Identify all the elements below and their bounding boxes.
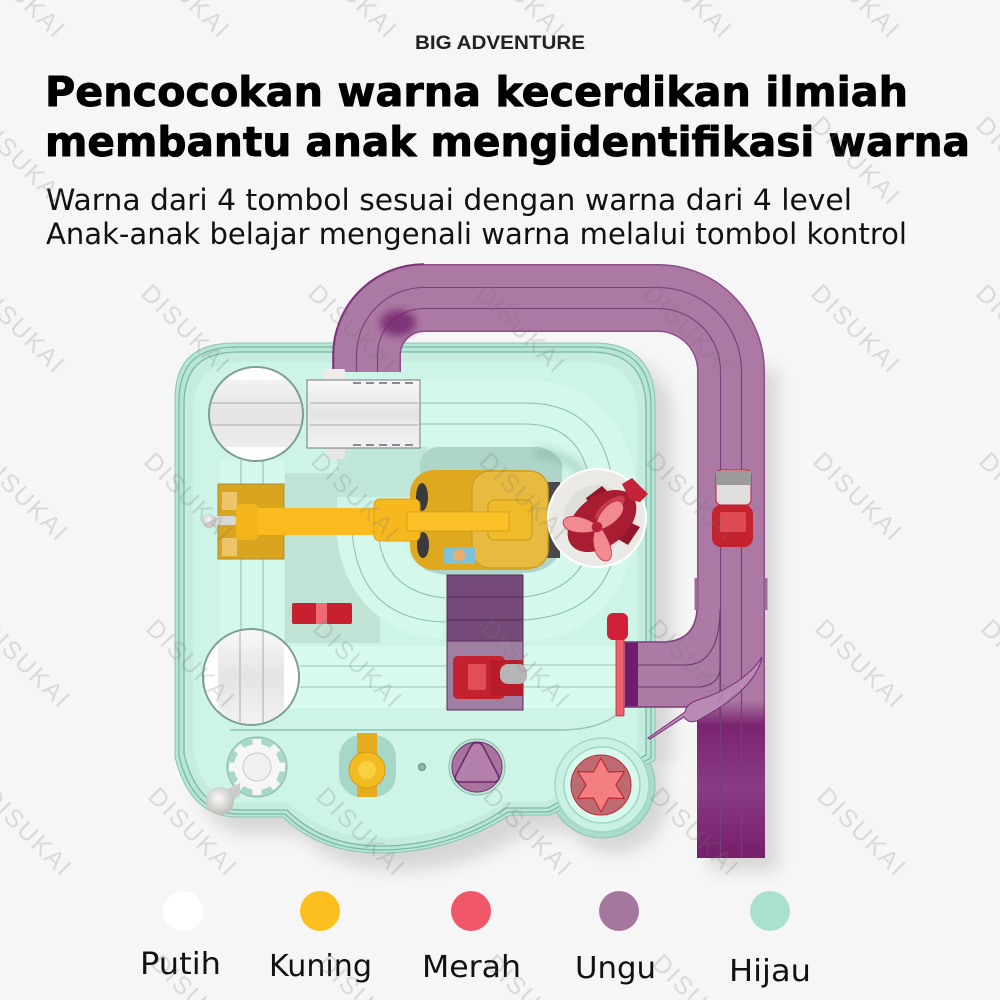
watermarks: DISUKAI bbox=[805, 111, 906, 212]
red block bbox=[292, 603, 352, 624]
watermarks: DISUKAI bbox=[302, 279, 403, 380]
yellow slider bbox=[339, 733, 396, 797]
mint upper track bbox=[230, 403, 625, 730]
colour labels: Hijau bbox=[729, 954, 811, 989]
swatch: red bbox=[451, 891, 491, 931]
watermarks: DISUKAI bbox=[807, 447, 908, 548]
red car in block bbox=[453, 656, 527, 699]
excavator arm bbox=[236, 499, 509, 541]
purple track bbox=[367, 288, 765, 858]
swatch: green bbox=[750, 891, 790, 931]
lower-left white turntable bbox=[200, 629, 302, 725]
watermarks: DISUKAI bbox=[310, 782, 411, 883]
swatch: white bbox=[163, 891, 203, 931]
watermarks: DISUKAI bbox=[644, 782, 745, 883]
lower dark section bbox=[697, 700, 765, 858]
subtitle: Anak-anak belajar mengenali warna melalui tombol kontrol bbox=[46, 217, 907, 251]
pink pointer lever bbox=[648, 657, 762, 739]
mint left track bbox=[220, 460, 284, 640]
purple track end over board bbox=[333, 264, 447, 372]
red car on right track bbox=[712, 470, 753, 547]
recessed centre bbox=[285, 447, 562, 643]
track collar bbox=[696, 578, 766, 610]
colour labels: Ungu bbox=[575, 951, 656, 986]
watermarks: DISUKAI bbox=[475, 614, 576, 715]
screw bbox=[418, 764, 426, 770]
watermarks: DISUKAI bbox=[140, 614, 241, 715]
red star button bbox=[571, 755, 631, 815]
subtitle: Warna dari 4 tombol sesuai dengan warna dari 4 level bbox=[46, 183, 852, 217]
white bridge block bbox=[307, 369, 420, 459]
subtitle bbox=[46, 183, 907, 251]
watermarks: DISUKAI bbox=[307, 614, 408, 715]
track bend shade bbox=[380, 310, 416, 336]
watermarks: DISUKAI bbox=[811, 782, 912, 883]
white gear bbox=[206, 737, 287, 815]
watermarks: DISUKAI bbox=[805, 279, 906, 380]
watermarks: DISUKAI bbox=[473, 447, 574, 548]
watermarks: DISUKAI bbox=[642, 614, 743, 715]
plane turntable bbox=[548, 469, 648, 567]
gear knob bbox=[225, 783, 240, 805]
yellow crane block bbox=[202, 484, 284, 559]
watermarks: DISUKAI bbox=[809, 614, 910, 715]
watermarks: DISUKAI bbox=[640, 447, 741, 548]
crane handle bbox=[205, 516, 237, 525]
swatch: purple bbox=[599, 891, 639, 931]
colour labels bbox=[140, 947, 811, 989]
plane propeller bbox=[563, 501, 623, 561]
watermarks: DISUKAI bbox=[470, 279, 571, 380]
watermarks: DISUKAI bbox=[637, 279, 738, 380]
red lever bbox=[607, 613, 628, 716]
colour labels: Putih bbox=[140, 947, 221, 982]
excavator body bbox=[410, 470, 548, 570]
purple side branch bbox=[623, 578, 766, 720]
purple centre block bbox=[447, 575, 527, 710]
title bbox=[45, 68, 970, 166]
brand label: BIG ADVENTURE bbox=[415, 33, 585, 54]
board base bbox=[175, 343, 655, 853]
title: membantu anak mengidentifikasi warna bbox=[45, 118, 970, 166]
watermarks: DISUKAI bbox=[305, 447, 406, 548]
watermarks: DISUKAI bbox=[135, 279, 236, 380]
swatch: yellow bbox=[300, 891, 340, 931]
top-left white turntable bbox=[205, 365, 305, 462]
watermarks: DISUKAI bbox=[477, 782, 578, 883]
dark plates behind excavator bbox=[545, 482, 560, 558]
colour swatches bbox=[163, 891, 790, 931]
toy track set bbox=[175, 264, 778, 870]
mint lower track bbox=[290, 646, 625, 708]
title: Pencocokan warna kecerdikan ilmiah bbox=[45, 68, 908, 116]
drop shadows bbox=[192, 360, 778, 870]
purple triangle button bbox=[449, 739, 505, 795]
watermarks: DISUKAI bbox=[142, 782, 243, 883]
colour labels: Kuning bbox=[269, 949, 372, 984]
colour labels: Merah bbox=[422, 950, 521, 985]
watermarks: DISUKAI bbox=[138, 447, 239, 548]
